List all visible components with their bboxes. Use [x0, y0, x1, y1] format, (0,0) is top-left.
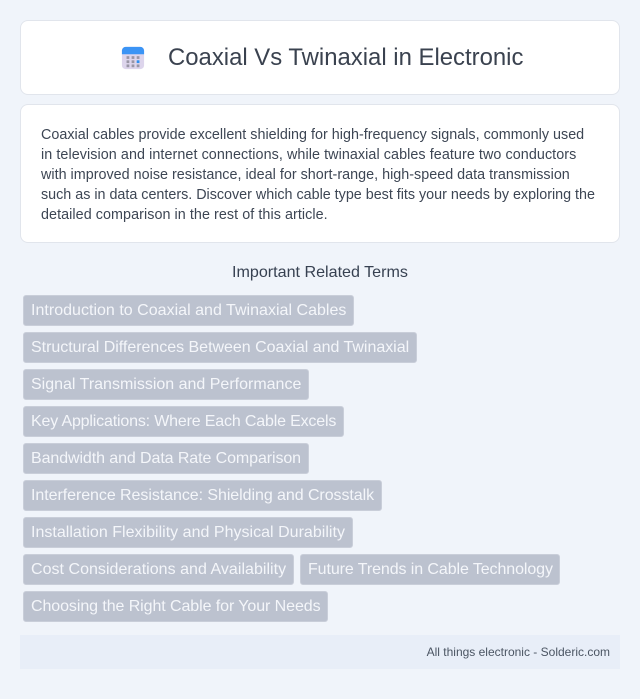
tag — [300, 554, 560, 585]
tag: Cost Considerations and Availability — [31, 561, 286, 578]
tag — [23, 406, 344, 437]
tag — [23, 591, 328, 622]
intro paragraph: Coaxial cables provide excellent shielding for high-frequency signals, commonly used — [41, 127, 584, 143]
tag: Interference Resistance: Shielding and Crosstalk — [31, 487, 374, 504]
tag: Introduction to Coaxial and Twinaxial Cables — [31, 302, 346, 319]
related terms tags — [23, 295, 560, 622]
tag: Key Applications: Where Each Cable Excels — [31, 413, 336, 430]
footer credit: All things electronic - Solderic.com — [427, 645, 610, 659]
tag — [23, 554, 294, 585]
section heading: Important Related Terms — [232, 263, 408, 281]
tag: Future Trends in Cable Technology — [308, 561, 553, 578]
header panel — [20, 20, 620, 95]
tag — [23, 295, 354, 326]
intro text panel — [20, 104, 620, 243]
tag — [23, 480, 382, 511]
intro paragraph — [41, 127, 595, 223]
tag: Signal Transmission and Performance — [31, 376, 301, 393]
tag — [23, 332, 417, 363]
footer bar — [20, 635, 620, 669]
intro paragraph: with improved noise resistance, ideal for short-range, high-speed data transmission — [41, 167, 570, 183]
tag: Choosing the Right Cable for Your Needs — [31, 598, 321, 615]
tag: Installation Flexibility and Physical Durability — [31, 524, 345, 541]
intro paragraph: such as in data centers. Discover which cable type best fits your needs by exploring the — [41, 187, 595, 203]
tag: Structural Differences Between Coaxial and Twinaxial — [31, 339, 409, 356]
tag — [23, 443, 309, 474]
tag: Bandwidth and Data Rate Comparison — [31, 450, 301, 467]
icon: calendar — [122, 46, 144, 70]
tag — [23, 517, 353, 548]
title: Coaxial Vs Twinaxial in Electronic — [168, 44, 523, 71]
intro paragraph: in television and internet connections, while twinaxial cables feature two conductors — [41, 147, 576, 163]
intro paragraph: detailed comparison in the rest of this article. — [41, 207, 328, 223]
tag — [23, 369, 309, 400]
